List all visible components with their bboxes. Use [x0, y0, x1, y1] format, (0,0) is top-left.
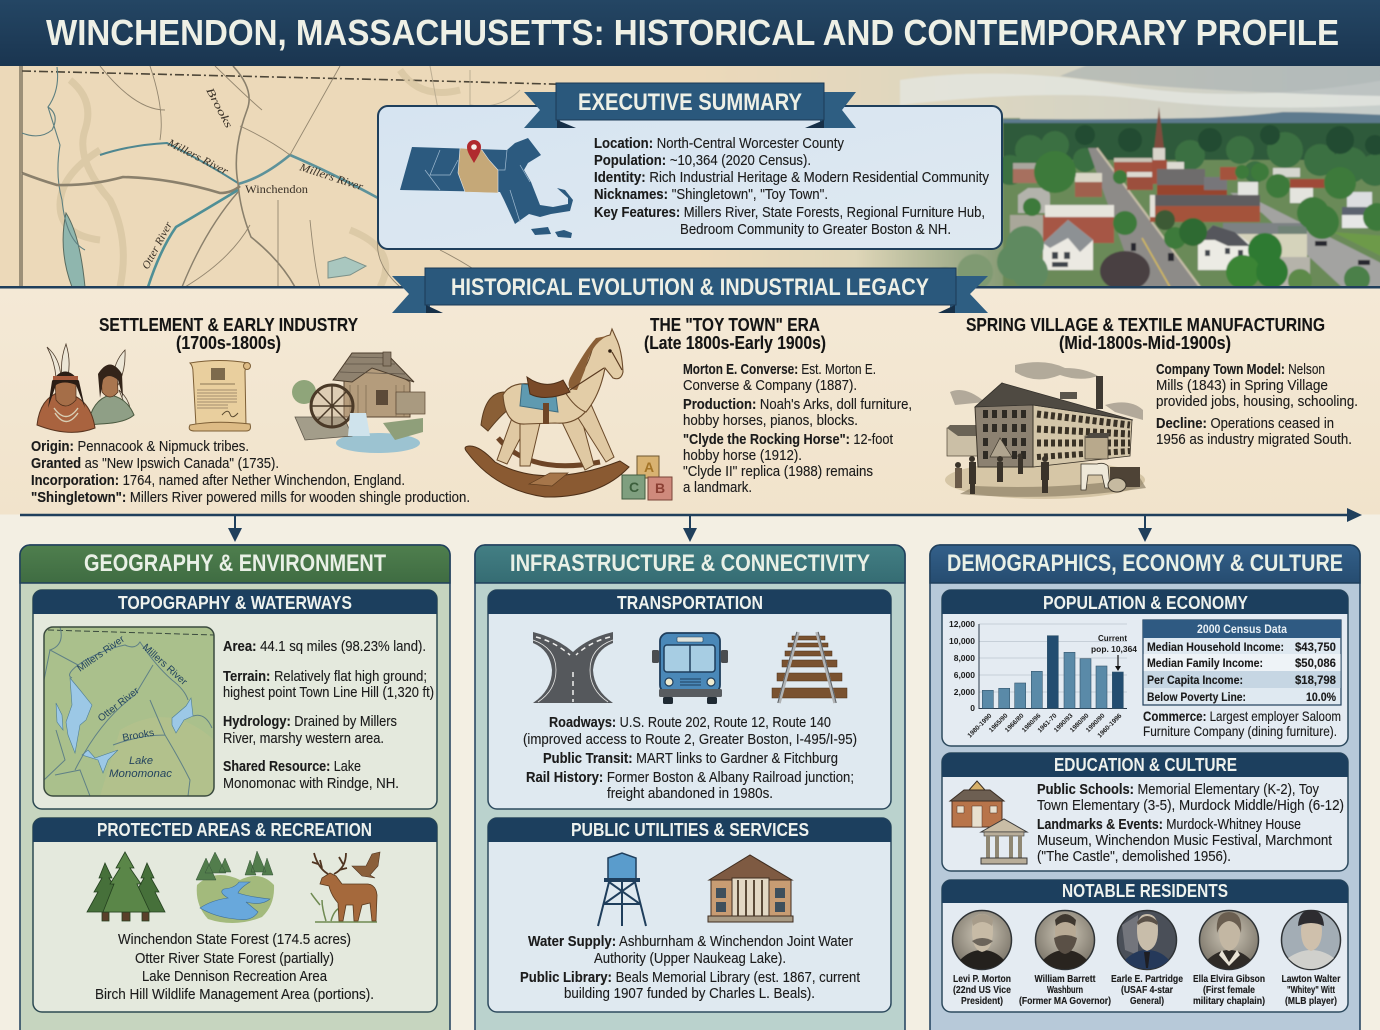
street trees: [932, 151, 1380, 293]
panel: education and culture: EDUCATION & CULTURE: [1054, 755, 1237, 775]
ribbon: executive summary: EXECUTIVE SUMMARY: [578, 89, 802, 116]
captions: notable residents: William Barrett: [1034, 974, 1096, 985]
text: transportation: Public Transit: MART links to Gardner & Fitchburg: [543, 750, 838, 767]
text: utilities: [520, 933, 861, 1002]
text: transportation: Rail History: Former Boston & Albany Railroad junction;: [526, 769, 854, 786]
panel: transportation: TRANSPORTATION: [617, 593, 763, 613]
topographic map: Monomonac: [109, 768, 173, 780]
text: utilities: building 1907 funded by Charles L. Beals).: [564, 985, 815, 1002]
bar chart: population: 1965/90: [988, 712, 1010, 734]
icon: Massachusetts locator map: [400, 138, 573, 238]
arrow: timeline: [20, 508, 1362, 542]
callout: current population: [1091, 633, 1137, 671]
topographic map: Brooks: [122, 728, 155, 744]
map labels: Millers River: [165, 136, 231, 178]
icon: museum building: [981, 819, 1027, 864]
topographic map: Otter River: [96, 685, 142, 724]
bar chart: population: 8,000: [954, 653, 975, 663]
table: 2000 census data: Median Family Income:: [1147, 656, 1263, 670]
hero band: [0, 60, 1380, 293]
text: education: ("The Castle", demolished 1956).: [1037, 848, 1231, 865]
icon: alphabet blocks: B: [655, 480, 665, 496]
text: commerce: Commerce: Largest employer Saloom: [1143, 708, 1341, 724]
text: toy town facts: hobby horses, pianos, blocks.: [683, 412, 858, 429]
panel: public utilities and services: [488, 818, 891, 1012]
hero bottom border: [0, 286, 1380, 288]
captions: notable residents: Lawton Walter: [1282, 974, 1341, 985]
icon: MART bus: [652, 633, 728, 704]
text: toy town facts: "Clyde II" replica (1988) remains: [683, 463, 873, 480]
text: settlement facts: [31, 438, 470, 506]
workers: [955, 454, 1049, 494]
icon: colonial land grant scroll: [189, 360, 250, 431]
bar chart: population: 12,000: [949, 619, 975, 629]
text: protected areas: Lake Dennison Recreation Area: [142, 968, 328, 985]
text: protected areas: [95, 931, 374, 1003]
text: utilities: Water Supply: Ashburnham & Winchendon Joint Water: [528, 933, 853, 950]
captions: notable residents: (Former MA Governor): [1019, 996, 1111, 1007]
captions: notable residents: President): [961, 996, 1003, 1007]
heading: settlement: (1700s-1800s): [176, 333, 281, 353]
captions: notable residents: (MLB player): [1285, 996, 1337, 1007]
heading: toy town: (Late 1800s-Early 1900s): [644, 333, 826, 353]
heading: infrastructure: INFRASTRUCTURE & CONNECTIVITY: [510, 550, 870, 577]
summary text: Bedroom Community to Greater Boston & NH.: [680, 221, 951, 238]
text: education: [1037, 781, 1344, 865]
text: protected areas: Otter River State Forest (partially): [135, 950, 334, 967]
text: toy town facts: Converse & Company (1887).: [683, 377, 857, 394]
side street: [1230, 193, 1380, 290]
panel: public utilities and services: PUBLIC UTILITIES & SERVICES: [571, 820, 809, 840]
icon: railroad tracks: [772, 632, 847, 703]
callout: current population: Current: [1098, 633, 1127, 643]
text: toy town facts: [683, 361, 912, 496]
illustration: textile mill: [945, 362, 1146, 499]
heading: spring village: (Mid-1800s-Mid-1900s): [1059, 333, 1231, 353]
captions: notable residents: (22nd US Vice: [953, 985, 1011, 996]
summary text: Location: North-Central Worcester County: [594, 135, 844, 152]
portrait: Lawton Walter Witt: [1282, 910, 1340, 970]
panel: protected areas and recreation: PROTECTED AREAS & RECREATION: [97, 820, 372, 840]
captions: notable residents: Levi P. Morton: [953, 974, 1011, 985]
ribbon: historical evolution: HISTORICAL EVOLUTION & INDUSTRIAL LEGACY: [451, 274, 929, 301]
icon: water tower: [598, 853, 646, 926]
portrait: Levi P. Morton: [952, 910, 1012, 970]
table: 2000 census data: Per Capita Income:: [1147, 673, 1243, 687]
panel: notable residents: NOTABLE RESIDENTS: [1062, 881, 1228, 901]
text: toy town facts: Production: Noah's Arks, doll furniture,: [683, 396, 912, 413]
table: 2000 census data: Median Household Income:: [1147, 640, 1284, 654]
panel: protected areas and recreation: [33, 818, 437, 1012]
icon: alphabet blocks: A: [644, 459, 654, 475]
text: settlement facts: Granted as "New Ipswich Canada" (1735).: [31, 455, 279, 472]
antique map: Winchendon: [245, 182, 308, 196]
right street buildings: [1198, 167, 1372, 287]
icon: highway interchange: [533, 632, 613, 703]
summary text: Population: ~10,364 (2020 Census).: [594, 152, 811, 169]
summary text: Key Features: Millers River, State Forests, Regional Furniture Hub,: [594, 204, 985, 221]
bar chart: population: 10,000: [949, 636, 975, 646]
text: transportation: [523, 714, 857, 802]
captions: notable residents: Washburn: [1047, 985, 1083, 996]
panel: education and culture: [942, 753, 1348, 871]
bar chart: population: 1960-1996: [1096, 712, 1124, 739]
icon: water mill: [292, 352, 425, 453]
history background: [0, 288, 1380, 514]
text: education: Museum, Winchendon Music Festival, Marchmont: [1037, 832, 1333, 849]
aerial town photograph: [690, 60, 1380, 293]
topographic map: [44, 627, 214, 796]
antique map: [0, 66, 720, 287]
title banner: [0, 0, 1380, 66]
topography facts: River, marshy western area.: [223, 730, 384, 747]
icon: rocking horse: [465, 329, 629, 497]
summary text: Nicknames: "Shingletown", "Toy Town".: [594, 186, 828, 203]
text: transportation: Roadways: U.S. Route 202, Route 12, Route 140: [549, 714, 831, 731]
text: spring village facts: [1156, 361, 1358, 448]
heading: settlement: [99, 315, 358, 353]
panel: topography and waterways: [33, 590, 437, 809]
table: 2000 census data: $43,750: [1295, 640, 1336, 654]
church and brick blocks: [1114, 107, 1260, 222]
icon: pine trees: [87, 852, 165, 921]
panel: topography and waterways: TOPOGRAPHY & WATERWAYS: [118, 593, 352, 613]
icon: alphabet blocks: C: [629, 479, 639, 495]
text: toy town facts: Morton E. Converse: Est. Morton E.: [683, 361, 876, 378]
forest canopy: [995, 131, 1380, 186]
summary text: [594, 135, 989, 238]
panel: population and economy: POPULATION & ECONOMY: [1043, 593, 1248, 613]
text: education: Landmarks & Events: Murdock-Whitney House: [1037, 816, 1301, 833]
panel: population and economy: [942, 590, 1348, 746]
text: toy town facts: a landmark.: [683, 479, 752, 496]
ribbon: historical evolution: [392, 268, 988, 313]
bar chart: population: 1990/93: [1053, 712, 1075, 734]
topography facts: Monomonac with Rindge, NH.: [223, 775, 399, 792]
panel: demographics, economy and culture: [930, 545, 1360, 1030]
bar chart: population: 1980/96: [1021, 712, 1043, 734]
table: 2000 census data: [1143, 620, 1341, 705]
text: settlement facts: "Shingletown": Millers River powered mills for wooden shingle production.: [31, 489, 470, 506]
topographic map: Lake: [129, 755, 153, 767]
horse and cart: [1081, 463, 1110, 490]
panel: transportation: [488, 590, 891, 809]
panel: geography and environment: [20, 545, 450, 1030]
icon: deer and hawk: [311, 852, 380, 922]
bar chart: population: 1990/90: [1085, 712, 1107, 734]
topographic map: Millers River: [140, 642, 189, 688]
table: 2000 census data: 2000 Census Data: [1197, 622, 1287, 636]
bar chart: population: 1961-70: [1037, 712, 1059, 734]
panel: executive summary: [378, 83, 1002, 249]
bar chart: population: 0: [970, 703, 975, 713]
bar chart: population: 1966/80: [1004, 712, 1026, 734]
antique map: Brooks: [203, 86, 235, 130]
topographic map: Millers River: [75, 634, 127, 674]
panel: infrastructure and connectivity: [475, 545, 905, 1030]
captions: notable residents: [953, 974, 1341, 1007]
text: commerce: Furniture Company (dining furniture).: [1143, 723, 1337, 739]
heading: spring village: [966, 315, 1325, 353]
topography facts: Area: 44.1 sq miles (98.23% land).: [223, 638, 426, 655]
heading: geography: GEOGRAPHY & ENVIRONMENT: [84, 550, 386, 577]
text: commerce: [1143, 708, 1341, 739]
text: protected areas: Winchendon State Forest (174.5 acres): [118, 931, 351, 948]
text: transportation: freight abandoned in 1980s.: [607, 785, 773, 802]
text: transportation: (improved access to Route 2, Greater Boston, I-495/I-95): [523, 731, 857, 748]
topography facts: Terrain: Relatively flat high ground;: [223, 668, 427, 685]
heading: spring village: SPRING VILLAGE & TEXTILE MANUFACTURING: [966, 315, 1325, 335]
text: spring village facts: 1956 as industry migrated South.: [1156, 431, 1352, 448]
bar chart: population: 1980/90: [1069, 712, 1091, 734]
topography facts: [223, 638, 434, 792]
captions: notable residents: Ella Elvira Gibson: [1193, 974, 1265, 985]
topography facts: Shared Resource: Lake: [223, 758, 361, 775]
panel: historical evolution: [31, 268, 1358, 506]
panel: notable residents: [942, 880, 1348, 1012]
text: toy town facts: hobby horse (1912).: [683, 447, 802, 464]
main street: [1088, 148, 1200, 287]
bar chart: population: [949, 619, 1137, 739]
text: spring village facts: Decline: Operations ceased in: [1156, 415, 1334, 432]
table: 2000 census data: $18,798: [1295, 673, 1336, 687]
portrait: Ella Elvira Gibson: [1200, 910, 1258, 970]
text: utilities: Authority (Upper Naukeag Lake).: [594, 950, 786, 967]
text: toy town facts: "Clyde the Rocking Horse": 12-foot: [683, 431, 894, 448]
topography facts: highest point Town Line Hill (1,320 ft): [223, 684, 434, 701]
left street buildings: [1010, 163, 1114, 270]
bar chart: population: 2,000: [954, 687, 975, 697]
ribbon: executive summary: [524, 83, 856, 128]
text: education: Public Schools: Memorial Elementary (K-2), Toy: [1037, 781, 1319, 798]
text: utilities: Public Library: Beals Memorial Library (est. 1867, current: [520, 969, 861, 986]
icon: schoolhouse: [950, 781, 1004, 827]
captions: notable residents: Earle E. Partridge: [1111, 974, 1183, 985]
text: spring village facts: Company Town Model: Nelson: [1156, 361, 1325, 378]
heading: settlement: SETTLEMENT & EARLY INDUSTRY: [99, 315, 358, 335]
captions: notable residents: General): [1130, 996, 1164, 1007]
icon: forest river: [196, 851, 274, 923]
icon: Beals Memorial Library: [708, 855, 793, 922]
text: settlement facts: Incorporation: 1764, named after Nether Winchendon, England.: [31, 472, 405, 489]
icon: location pin: [467, 140, 481, 163]
text: settlement facts: Origin: Pennacook & Nipmuck tribes.: [31, 438, 249, 455]
portrait: Earle E. Partridge: [1118, 910, 1176, 970]
bar chart: population: 1980-1990: [966, 712, 994, 739]
captions: notable residents: military chaplain): [1193, 996, 1265, 1007]
table: 2000 census data: $50,086: [1295, 656, 1336, 670]
topography facts: Hydrology: Drained by Millers: [223, 713, 397, 730]
captions: notable residents: (USAF 4-star: [1121, 985, 1173, 996]
heading: toy town: THE "TOY TOWN" ERA: [650, 315, 820, 335]
text: education: Town Elementary (3-5), Murdock Middle/High (6-12): [1037, 797, 1344, 814]
bar chart: population: 6,000: [954, 670, 975, 680]
captions: notable residents: "Whitey" Witt: [1287, 985, 1336, 996]
antique map: Millers River: [297, 161, 365, 193]
callout: current population: pop. 10,364: [1091, 644, 1137, 654]
text: spring village facts: Mills (1843) in Spring Village: [1156, 377, 1328, 394]
table: 2000 census data: 10.0%: [1306, 690, 1336, 704]
text: spring village facts: provided jobs, housing, schooling.: [1156, 393, 1358, 410]
portrait: William Barrett Washburn: [1036, 910, 1094, 970]
antique map: Otter River: [140, 219, 175, 271]
icon: alphabet blocks: [622, 456, 672, 500]
heading: toy town: [644, 315, 826, 353]
icon: Pennacook and Nipmuck portraits: [37, 344, 134, 432]
table: 2000 census data: Below Poverty Line:: [1147, 690, 1246, 704]
summary text: Identity: Rich Industrial Heritage & Modern Residential Community: [594, 169, 989, 186]
text: protected areas: Birch Hill Wildlife Management Area (portions).: [95, 986, 374, 1003]
captions: notable residents: (First female: [1203, 985, 1255, 996]
